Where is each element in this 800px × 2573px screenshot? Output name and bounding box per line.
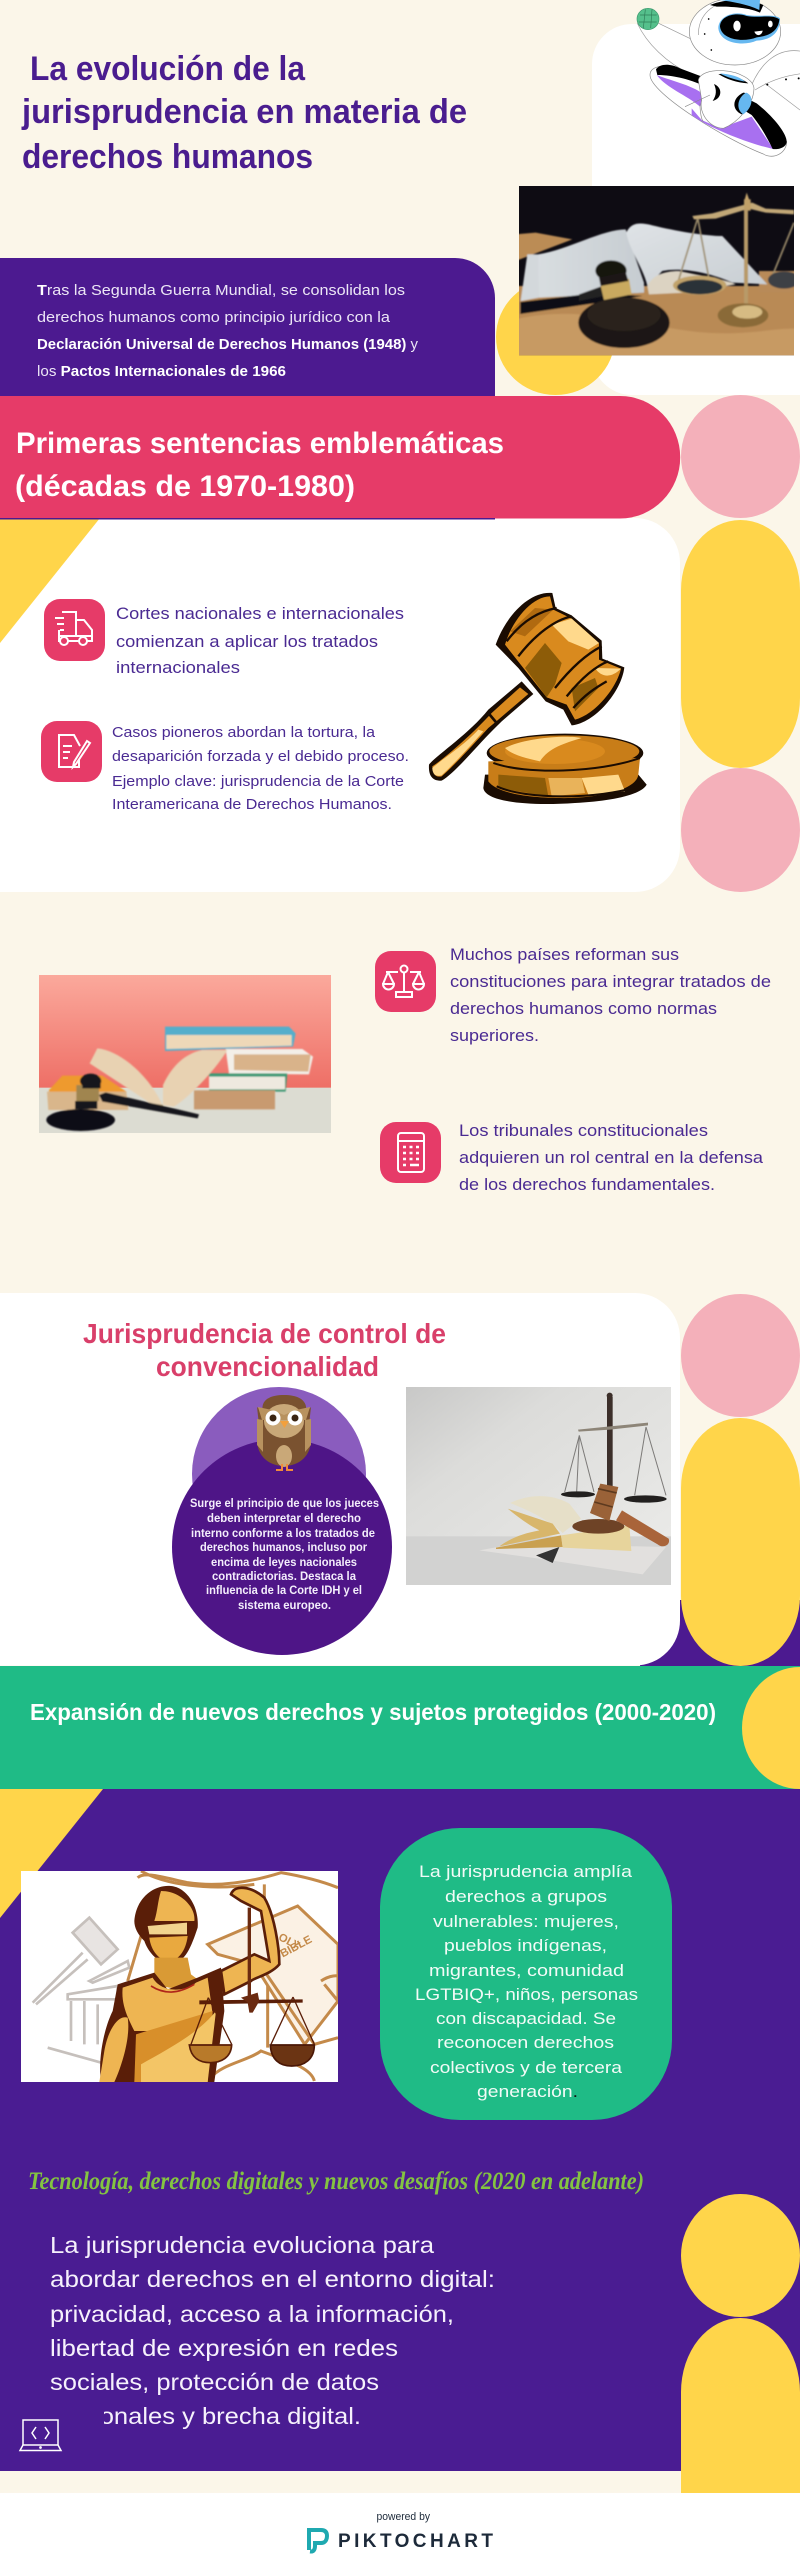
panel: white section 1 — [0, 518, 680, 892]
circle text: encima de leyes nacionales — [211, 1557, 357, 1569]
text: entorno digital: La jurisprudencia evoluciona para — [50, 2232, 434, 2258]
heading — [83, 1318, 446, 1382]
text: casos pioneros: Casos pioneros abordan la tortura, la — [112, 725, 376, 741]
text: tribunales constitucionales: adquieren un rol central en la defensa — [459, 1149, 764, 1167]
text: cortes nacionales: comienzan a aplicar los tratados — [116, 633, 378, 651]
text: cortes nacionales: Cortes nacionales e internacionales — [116, 605, 404, 623]
panel text: derechos a grupos — [445, 1888, 607, 1906]
panel text: colectivos y de tercera — [430, 2059, 623, 2077]
logo wordmark: PIKTOCHART — [338, 2531, 493, 2552]
text: reformas constitucionales — [450, 946, 771, 1045]
panel: grupos vulnerables — [380, 1828, 672, 2120]
heading: convencionalidad — [156, 1351, 379, 1382]
right column decorative shapes: section 3 — [681, 1294, 800, 1666]
intro text: derechos humanos como principio jurídico con la — [37, 309, 391, 326]
intro text: Tras la Segunda Guerra Mundial, se consolidan los — [37, 282, 405, 299]
heading: (décadas de 1970-1980) — [15, 470, 355, 503]
circle text: contradictorias. Destaca la — [212, 1571, 357, 1583]
photo: scales, book and gavel on grey — [406, 1387, 671, 1585]
text: cortes nacionales — [116, 605, 404, 677]
text: reformas constitucionales: superiores. — [450, 1027, 539, 1045]
logo mark — [309, 2530, 327, 2552]
text: casos pioneros: Interamericana de Derechos Humanos. — [112, 797, 392, 813]
illustration: robot — [637, 0, 800, 156]
light purple circle — [192, 1387, 366, 1561]
panel text: reconocen derechos — [437, 2034, 614, 2052]
text: entorno digital: abordar derechos en el entorno digital: — [50, 2266, 495, 2292]
text: entorno digital: libertad de expresión en redes — [50, 2335, 398, 2361]
text: tribunales constitucionales: Los tribunales constitucionales — [459, 1122, 708, 1140]
yellow triangle — [0, 518, 100, 643]
text: entorno digital: sociales, protección de datos — [50, 2369, 379, 2395]
illustration: lady justice: OLY — [276, 1931, 302, 1953]
circle text: Surge el principio de que los jueces — [190, 1498, 379, 1510]
dark purple circle — [172, 1439, 392, 1655]
text: entorno digital — [50, 2232, 495, 2429]
text: casos pioneros: desaparición forzada y el debido proceso. — [112, 749, 409, 765]
purple mask behind icon — [0, 2403, 104, 2453]
panel: purple section — [0, 1789, 800, 2471]
text: entorno digital: personales y brecha digital. — [50, 2403, 361, 2429]
intro text — [37, 282, 418, 380]
panel text: generación . — [477, 2083, 578, 2101]
yellow half circle — [742, 1667, 800, 1789]
circle text — [190, 1498, 379, 1612]
heading: Primeras sentencias emblemáticas — [16, 427, 504, 460]
footer — [0, 2493, 800, 2573]
icon: owl — [257, 1395, 311, 1470]
banner: primeras sentencias — [0, 396, 680, 520]
yellow triangle — [0, 1789, 103, 1918]
banner: expansión de nuevos derechos — [0, 1666, 800, 1789]
illustration: lady justice: BIBLE — [278, 1934, 314, 1960]
icon: document and pencil — [41, 721, 102, 782]
intro text: Declaración Universal de Derechos Humanos (1948) y — [37, 336, 418, 353]
text: casos pioneros — [112, 725, 409, 813]
text: casos pioneros: Ejemplo clave: jurisprudencia de la Corte — [112, 774, 404, 790]
circle text: interno conforme a los tratados de — [191, 1528, 375, 1540]
powered by: powered by — [376, 2511, 430, 2523]
text: entorno digital: privacidad, acceso a la información, — [50, 2301, 454, 2327]
text: reformas constitucionales: constituciones para integrar tratados de — [450, 973, 771, 991]
right column decorative shapes: section 1 — [681, 395, 800, 892]
icon: balance scale — [375, 951, 436, 1012]
icon: calculator — [380, 1122, 441, 1183]
illustration: lady justice — [21, 1871, 338, 2082]
title: jurisprudencia en materia de — [21, 93, 467, 131]
panel text — [415, 1863, 638, 2101]
text: tribunales constitucionales: de los derechos fundamentales. — [459, 1176, 715, 1194]
purple backdrop behind lower corner — [640, 1600, 800, 1666]
circle text: derechos humanos, incluso por — [200, 1542, 368, 1554]
heading: tecnología: Tecnología, derechos digitales y nuevos desafíos (2020 en adelante) — [28, 2168, 644, 2195]
text: tribunales constitucionales — [459, 1122, 764, 1194]
panel text: La jurisprudencia amplía — [419, 1863, 633, 1881]
circle text: influencia de la Corte IDH y el — [206, 1585, 362, 1597]
title: La evolución de la — [30, 50, 306, 88]
panel: introduction — [0, 258, 495, 396]
heading — [15, 427, 504, 503]
panel text: LGTBIQ+, niños, personas — [415, 1986, 638, 2004]
panel text: con discapacidad. Se — [436, 2010, 616, 2028]
title — [21, 50, 467, 176]
header white panel — [592, 24, 800, 395]
title: derechos humanos — [22, 138, 313, 176]
panel text: migrantes, comunidad — [429, 1962, 624, 1980]
photo: books and gavel on pink background — [39, 975, 331, 1133]
panel text: pueblos indígenas, — [444, 1937, 607, 1955]
intro text: los Pactos Internacionales de 1966 — [37, 363, 286, 380]
text: reformas constitucionales: Muchos países reforman sus — [450, 946, 679, 964]
panel: control de convencionalidad — [0, 1293, 680, 1666]
illustration: gavel — [429, 593, 647, 804]
circle text: sistema europeo. — [238, 1600, 331, 1612]
icon: laptop with code — [20, 2420, 61, 2450]
panel text: vulnerables: mujeres, — [433, 1913, 619, 1931]
cream strip — [0, 2471, 681, 2493]
text: reformas constitucionales: derechos humanos como normas — [450, 1000, 717, 1018]
yellow circle behind photo — [496, 279, 615, 395]
right column decorative shapes: bottom — [681, 2194, 800, 2493]
text: cortes nacionales: internacionales — [116, 659, 240, 677]
heading: Expansión de nuevos derechos y sujetos protegidos (2000-2020) — [30, 1699, 716, 1725]
icon: delivery truck — [44, 599, 105, 661]
photo: gavel, open book and scales — [516, 186, 800, 363]
heading: Jurisprudencia de control de — [83, 1318, 446, 1349]
circle text: deben interpretar el derecho — [207, 1513, 361, 1525]
